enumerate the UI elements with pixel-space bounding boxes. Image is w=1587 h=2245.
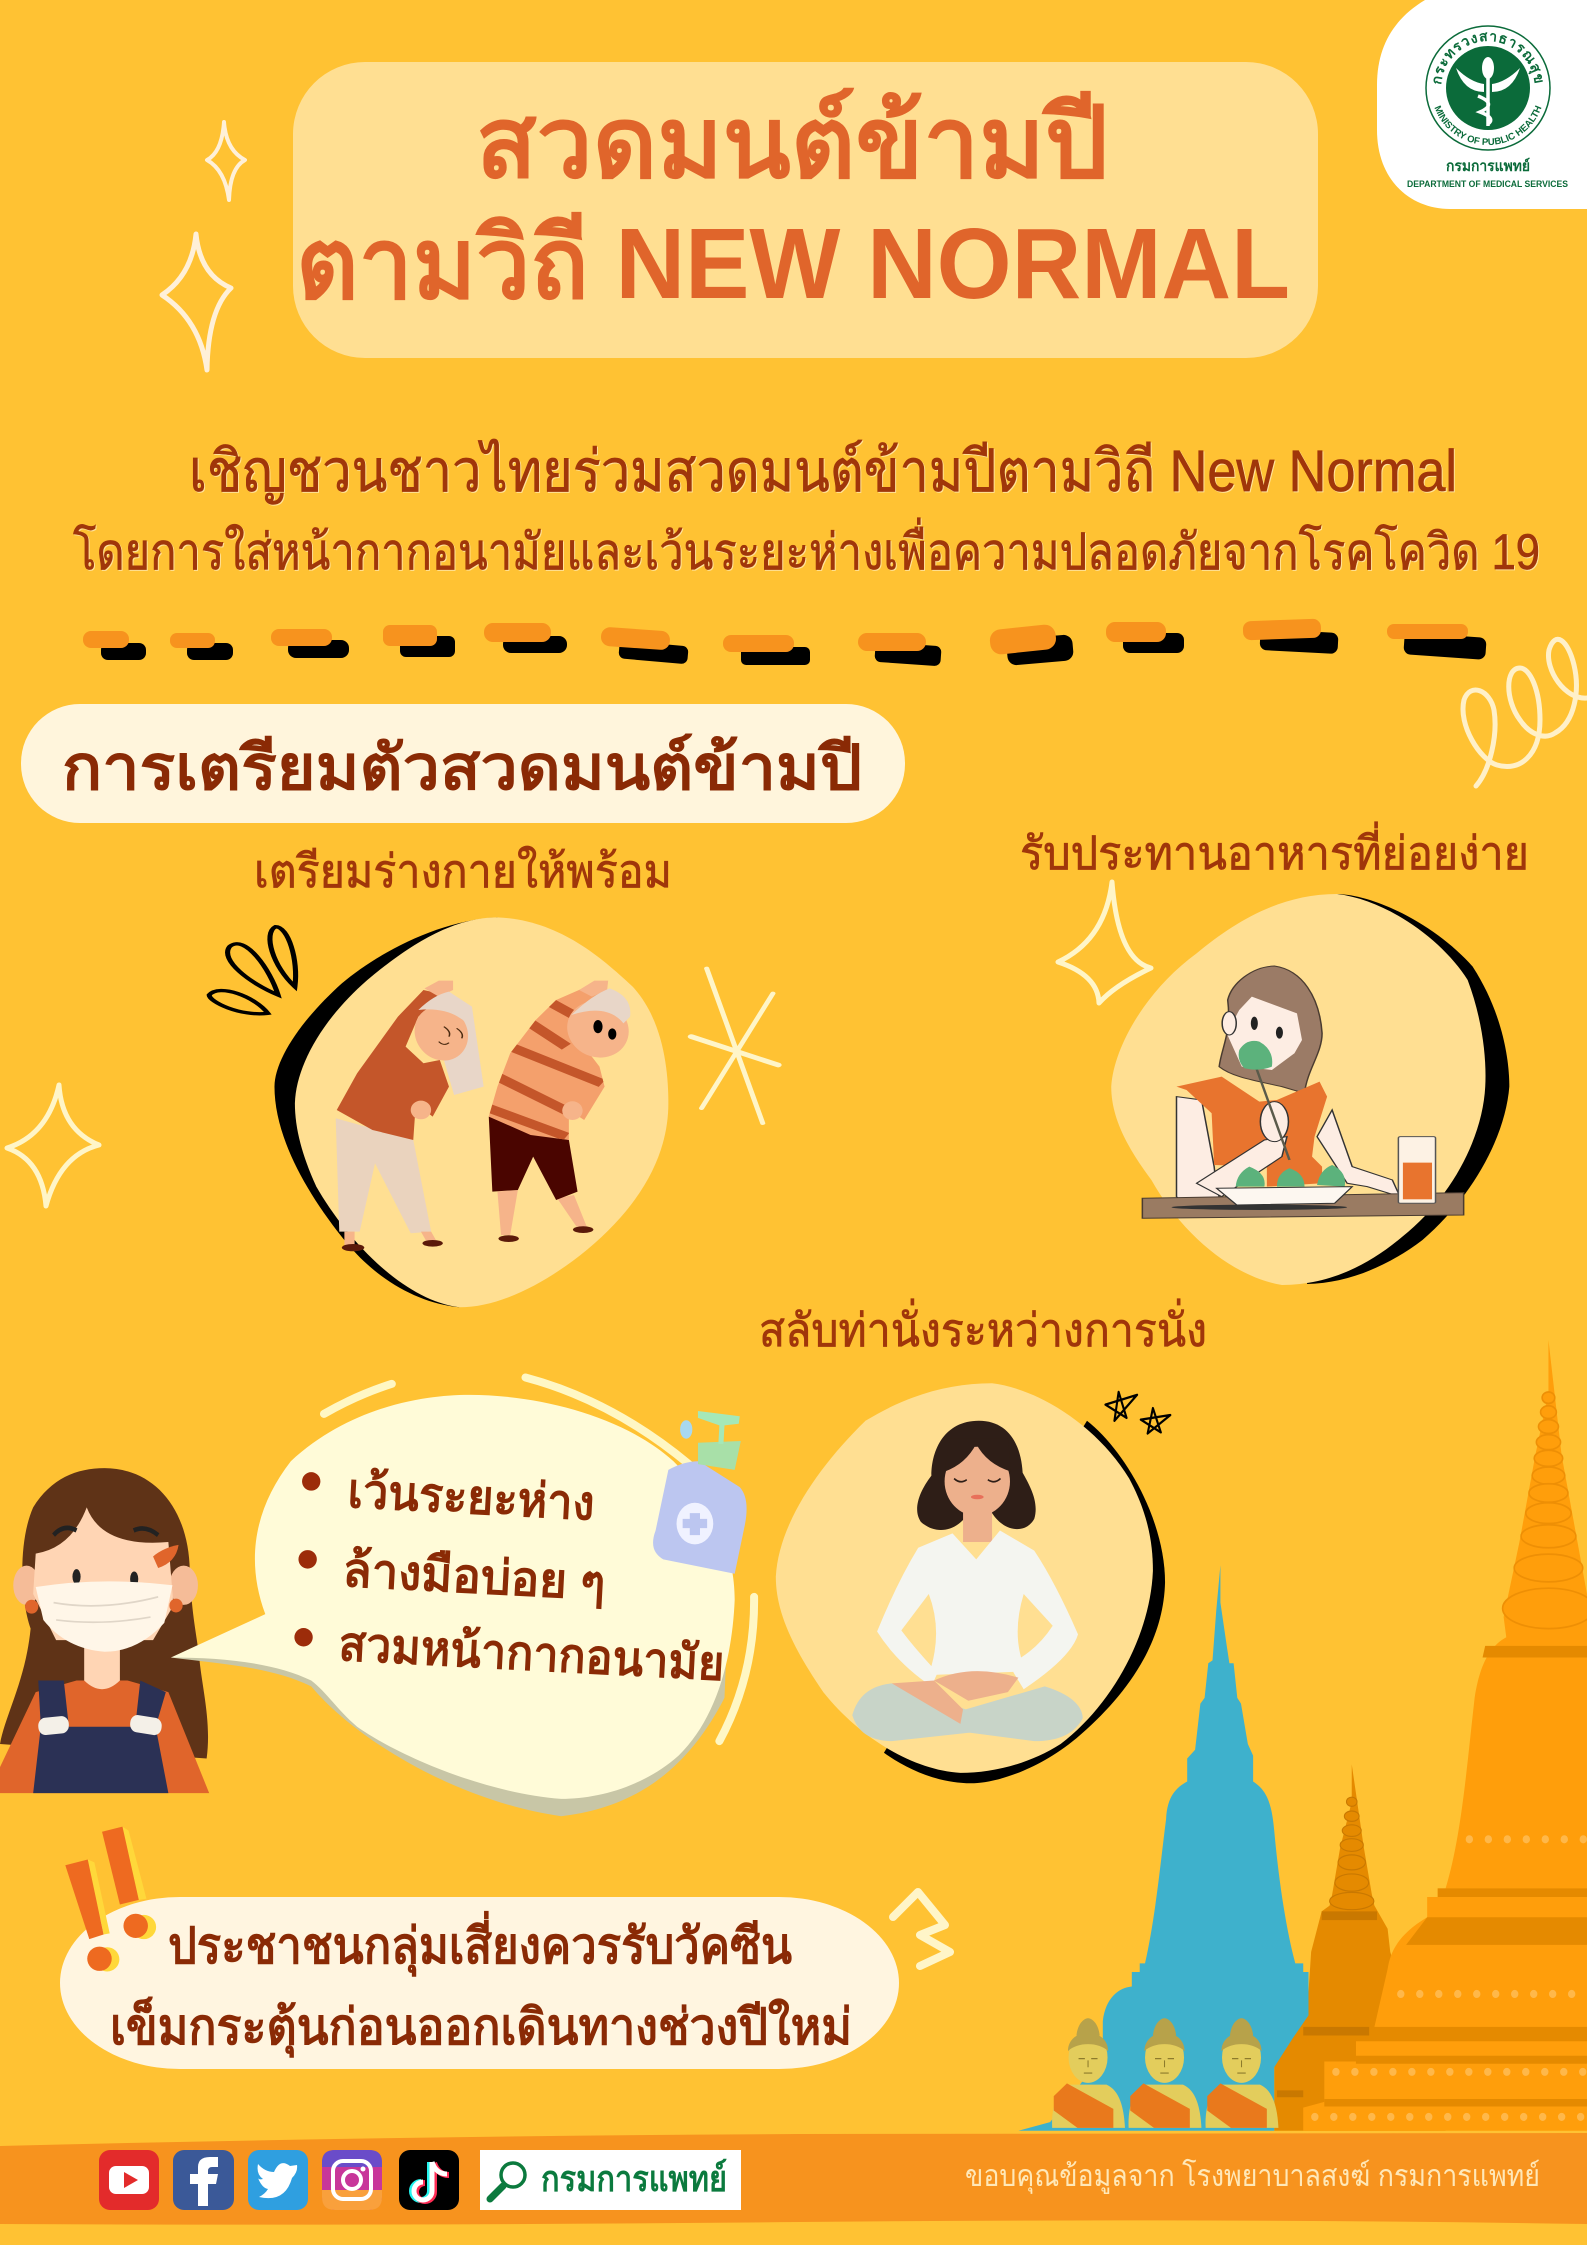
black petal doodle	[209, 927, 296, 1014]
man: head	[563, 999, 633, 1060]
trousers	[852, 1683, 1083, 1741]
medium orange stupa	[1274, 1764, 1446, 2131]
vaccine callout: ประชาชนกลุ่มเสี่ยงควรรับวัคซีน	[168, 1911, 792, 1977]
illustration: stretching seniors	[274, 917, 668, 1307]
man: shoes	[498, 1235, 519, 1242]
hand	[1260, 1102, 1288, 1142]
sparkle left	[7, 1085, 99, 1206]
ear	[1222, 1012, 1236, 1035]
icon: youtube	[99, 2150, 159, 2210]
sparkle large	[162, 234, 231, 370]
item heading: sitting: สลับท่านั่งระหว่างการนั่ง	[759, 1298, 1207, 1356]
arms	[1176, 1097, 1400, 1208]
lips	[971, 1495, 984, 1499]
hair	[917, 1421, 1036, 1530]
man: waist hand	[562, 1101, 583, 1120]
man: legs	[497, 1190, 587, 1235]
neck	[963, 1505, 992, 1542]
glass	[1398, 1137, 1436, 1203]
table	[1142, 1193, 1464, 1218]
icon: instagram	[322, 2150, 382, 2210]
bubble body	[171, 1395, 735, 1799]
earrings	[25, 1600, 38, 1614]
hands	[892, 1671, 1018, 1724]
logo panel: department of medical services: กระทรวงสาธารณสุข	[1434, 32, 1543, 84]
vaccine callout: เข็มกระตุ้นก่อนออกเดินทางช่วงปีใหม่	[110, 1996, 852, 2058]
title panel: สวดมนต์ข้ามปี	[476, 87, 1108, 199]
illustration: woman eating	[1111, 894, 1509, 1285]
medium spire rings	[1330, 1797, 1374, 1910]
search box: department name	[480, 2150, 741, 2210]
icon: twitter	[248, 2150, 308, 2210]
man: shorts	[489, 1117, 578, 1200]
accent arcs	[324, 1378, 754, 1741]
bullet text: distancing: เว้นระยะห่าง	[346, 1465, 596, 1531]
eyes	[72, 1569, 81, 1584]
blue stupa	[1018, 1565, 1308, 2131]
decorative coil	[1463, 639, 1587, 786]
medium stupa bands	[1277, 1911, 1377, 2097]
black crescent	[884, 1421, 1165, 1783]
item heading: body: เตรียมร่างกายให้พร้อม	[254, 845, 672, 897]
pale circle	[1111, 894, 1486, 1285]
man: raised hand	[579, 981, 608, 997]
brush dash divider	[83, 619, 1487, 666]
hair	[1219, 966, 1322, 1093]
big orange stupa	[1303, 1340, 1587, 2131]
gap right arm	[1018, 1594, 1053, 1657]
face	[1227, 997, 1302, 1070]
bullet text: hand washing: ล้างมือบ่อย ๆ	[341, 1544, 607, 1611]
man: shirt stripes	[485, 1000, 602, 1137]
logo panel: department of medical services: DEPARTMENT OF MEDICAL SERVICES	[1407, 179, 1568, 189]
fork	[1256, 1067, 1289, 1160]
man: striped shirt	[489, 983, 607, 1140]
woman: raised hand	[424, 981, 453, 997]
shadows on table	[1171, 1205, 1347, 1210]
big spire rings	[1503, 1392, 1587, 1629]
orange dress	[1176, 1077, 1327, 1187]
sweater	[877, 1530, 1078, 1689]
neck	[84, 1646, 120, 1689]
face	[945, 1447, 1010, 1516]
woman: closed eyes	[439, 1027, 462, 1044]
sparkle near food	[1058, 882, 1151, 1003]
closed eyes	[954, 1479, 1000, 1482]
woman: waist hand	[411, 1101, 431, 1119]
bubble shadow	[171, 1571, 730, 1816]
icon: exclamation marks	[65, 1827, 156, 1971]
juice	[1403, 1163, 1432, 1199]
shirt	[0, 1681, 209, 1793]
bowl	[1217, 1187, 1352, 1205]
icon: facebook	[173, 2150, 234, 2210]
invitation text	[73, 438, 1540, 580]
hair back	[0, 1468, 208, 1758]
icon: hand sanitizer bottle	[653, 1411, 747, 1574]
fringe	[945, 1438, 1011, 1472]
brows	[54, 1528, 158, 1535]
gap left arm	[901, 1594, 936, 1666]
forearm	[1197, 1137, 1287, 1197]
black crescent	[1307, 894, 1509, 1284]
broccoli on fork	[1239, 1041, 1272, 1070]
vaccine callout	[60, 1897, 899, 2069]
item heading: food: รับประทานอาหารที่ย่อยง่าย	[1020, 821, 1529, 879]
logo panel: department of medical services: กรมการแพทย์	[1446, 157, 1530, 175]
pale circle	[776, 1383, 1153, 1773]
woman: hair top	[418, 992, 467, 1023]
woman: ankles	[344, 1232, 436, 1245]
woman: head	[411, 1004, 472, 1062]
mask folds	[54, 1597, 158, 1622]
pale circle	[295, 917, 668, 1307]
sparkle small	[207, 122, 245, 200]
clips	[38, 1715, 69, 1736]
logo panel: department of medical services	[1377, 0, 1587, 209]
icon: tiktok	[399, 2150, 459, 2210]
buddha statue row	[1052, 2018, 1278, 2128]
black crescent	[274, 917, 497, 1307]
temple illustration	[1018, 1340, 1587, 2131]
mask	[36, 1581, 172, 1652]
asterisk sparkle	[691, 968, 778, 1123]
big stupa dots	[1315, 1839, 1587, 2117]
speech bubble	[171, 1378, 754, 1816]
illustration: meditation	[776, 1383, 1165, 1783]
hair clip	[153, 1545, 179, 1568]
section heading	[21, 704, 905, 823]
big stupa dark bands	[1324, 1646, 1587, 2107]
squiggle	[893, 1892, 950, 1966]
woman: grey hair	[444, 992, 484, 1095]
woman: legs and trousers	[336, 1118, 431, 1233]
broccoli in bowl	[1236, 1165, 1345, 1187]
section heading: การเตรียมตัวสวดมนต์ข้ามปี	[62, 733, 862, 803]
face	[33, 1507, 173, 1640]
title panel	[293, 62, 1318, 358]
man: eyes	[593, 1020, 616, 1040]
invitation text: เชิญชวนชาวไทยร่วมสวดมนต์ข้ามปีตามวิถี New Normal	[189, 438, 1457, 504]
bullet text: mask: สวมหน้ากากอนามัย	[337, 1618, 726, 1691]
eyes	[1251, 1017, 1283, 1039]
woman: shirt	[337, 990, 449, 1140]
ears	[13, 1566, 40, 1605]
logo panel: department of medical services: MINISTRY OF PUBLIC HEALTH	[1434, 105, 1542, 145]
bullet dots	[294, 1472, 320, 1646]
overalls	[33, 1681, 168, 1793]
title panel: ตามวิถี NEW NORMAL	[296, 208, 1290, 320]
man: hair	[571, 988, 630, 1023]
footer band	[0, 2133, 1587, 2225]
search box: department name: กรมการแพทย์	[541, 2158, 727, 2199]
woman: shoes	[342, 1244, 364, 1251]
illustration: girl wearing mask	[0, 1468, 209, 1793]
black stars doodle	[1105, 1392, 1170, 1434]
